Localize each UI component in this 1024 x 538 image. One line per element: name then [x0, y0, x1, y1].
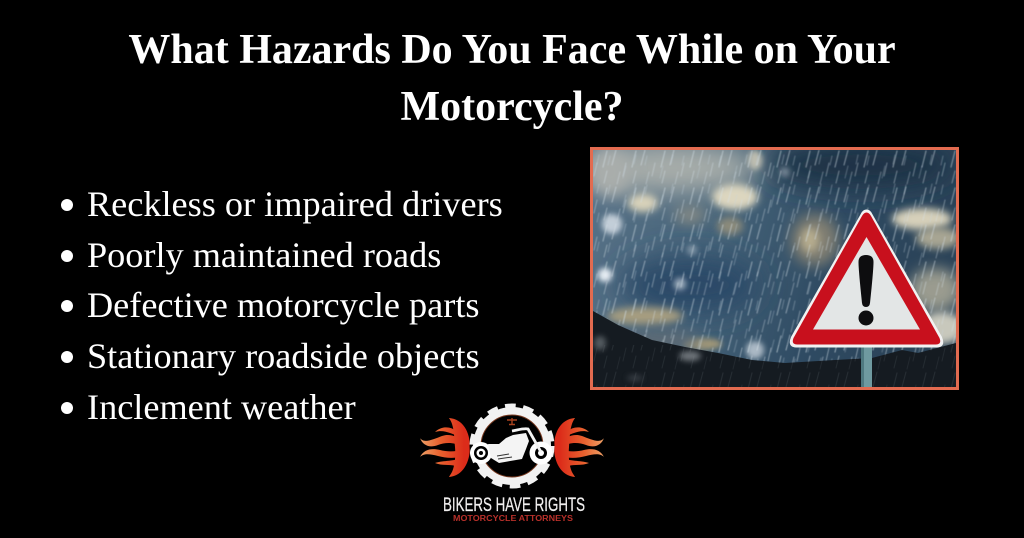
right flames	[554, 418, 604, 477]
bullet: reckless drivers: Reckless or impaired drivers	[87, 184, 503, 224]
clouds	[584, 142, 964, 350]
bullet: weather: Inclement weather	[87, 387, 356, 427]
logo tagline: MOTORCYCLE ATTORNEYS	[453, 514, 574, 523]
photo: rainy sky with warning sign	[584, 141, 964, 393]
bullet: defective parts: Defective motorcycle parts	[87, 285, 480, 325]
sign post	[864, 348, 872, 387]
title: What Hazards Do You Face While on Your	[128, 27, 896, 73]
storm sky	[593, 150, 956, 363]
photo frame	[592, 148, 958, 388]
bullet: roadside objects: Stationary roadside objects	[87, 336, 480, 376]
title: Motorcycle?	[400, 84, 624, 130]
scales emblem	[507, 418, 517, 425]
blurred raindrops	[598, 167, 790, 359]
bullet: poor roads: Poorly maintained roads	[87, 235, 441, 275]
bullet list of hazards	[61, 184, 503, 427]
exclamation mark	[858, 255, 874, 307]
warning triangle sign	[790, 210, 943, 348]
motorcycle	[470, 429, 552, 464]
left flames	[420, 418, 470, 477]
dark mountains	[593, 311, 956, 393]
logo: Bikers Have Rights	[420, 404, 604, 523]
rain streaks	[593, 150, 956, 362]
title	[128, 27, 896, 130]
gear	[470, 404, 554, 488]
logo name: BIKERS HAVE RIGHTS	[443, 495, 585, 516]
